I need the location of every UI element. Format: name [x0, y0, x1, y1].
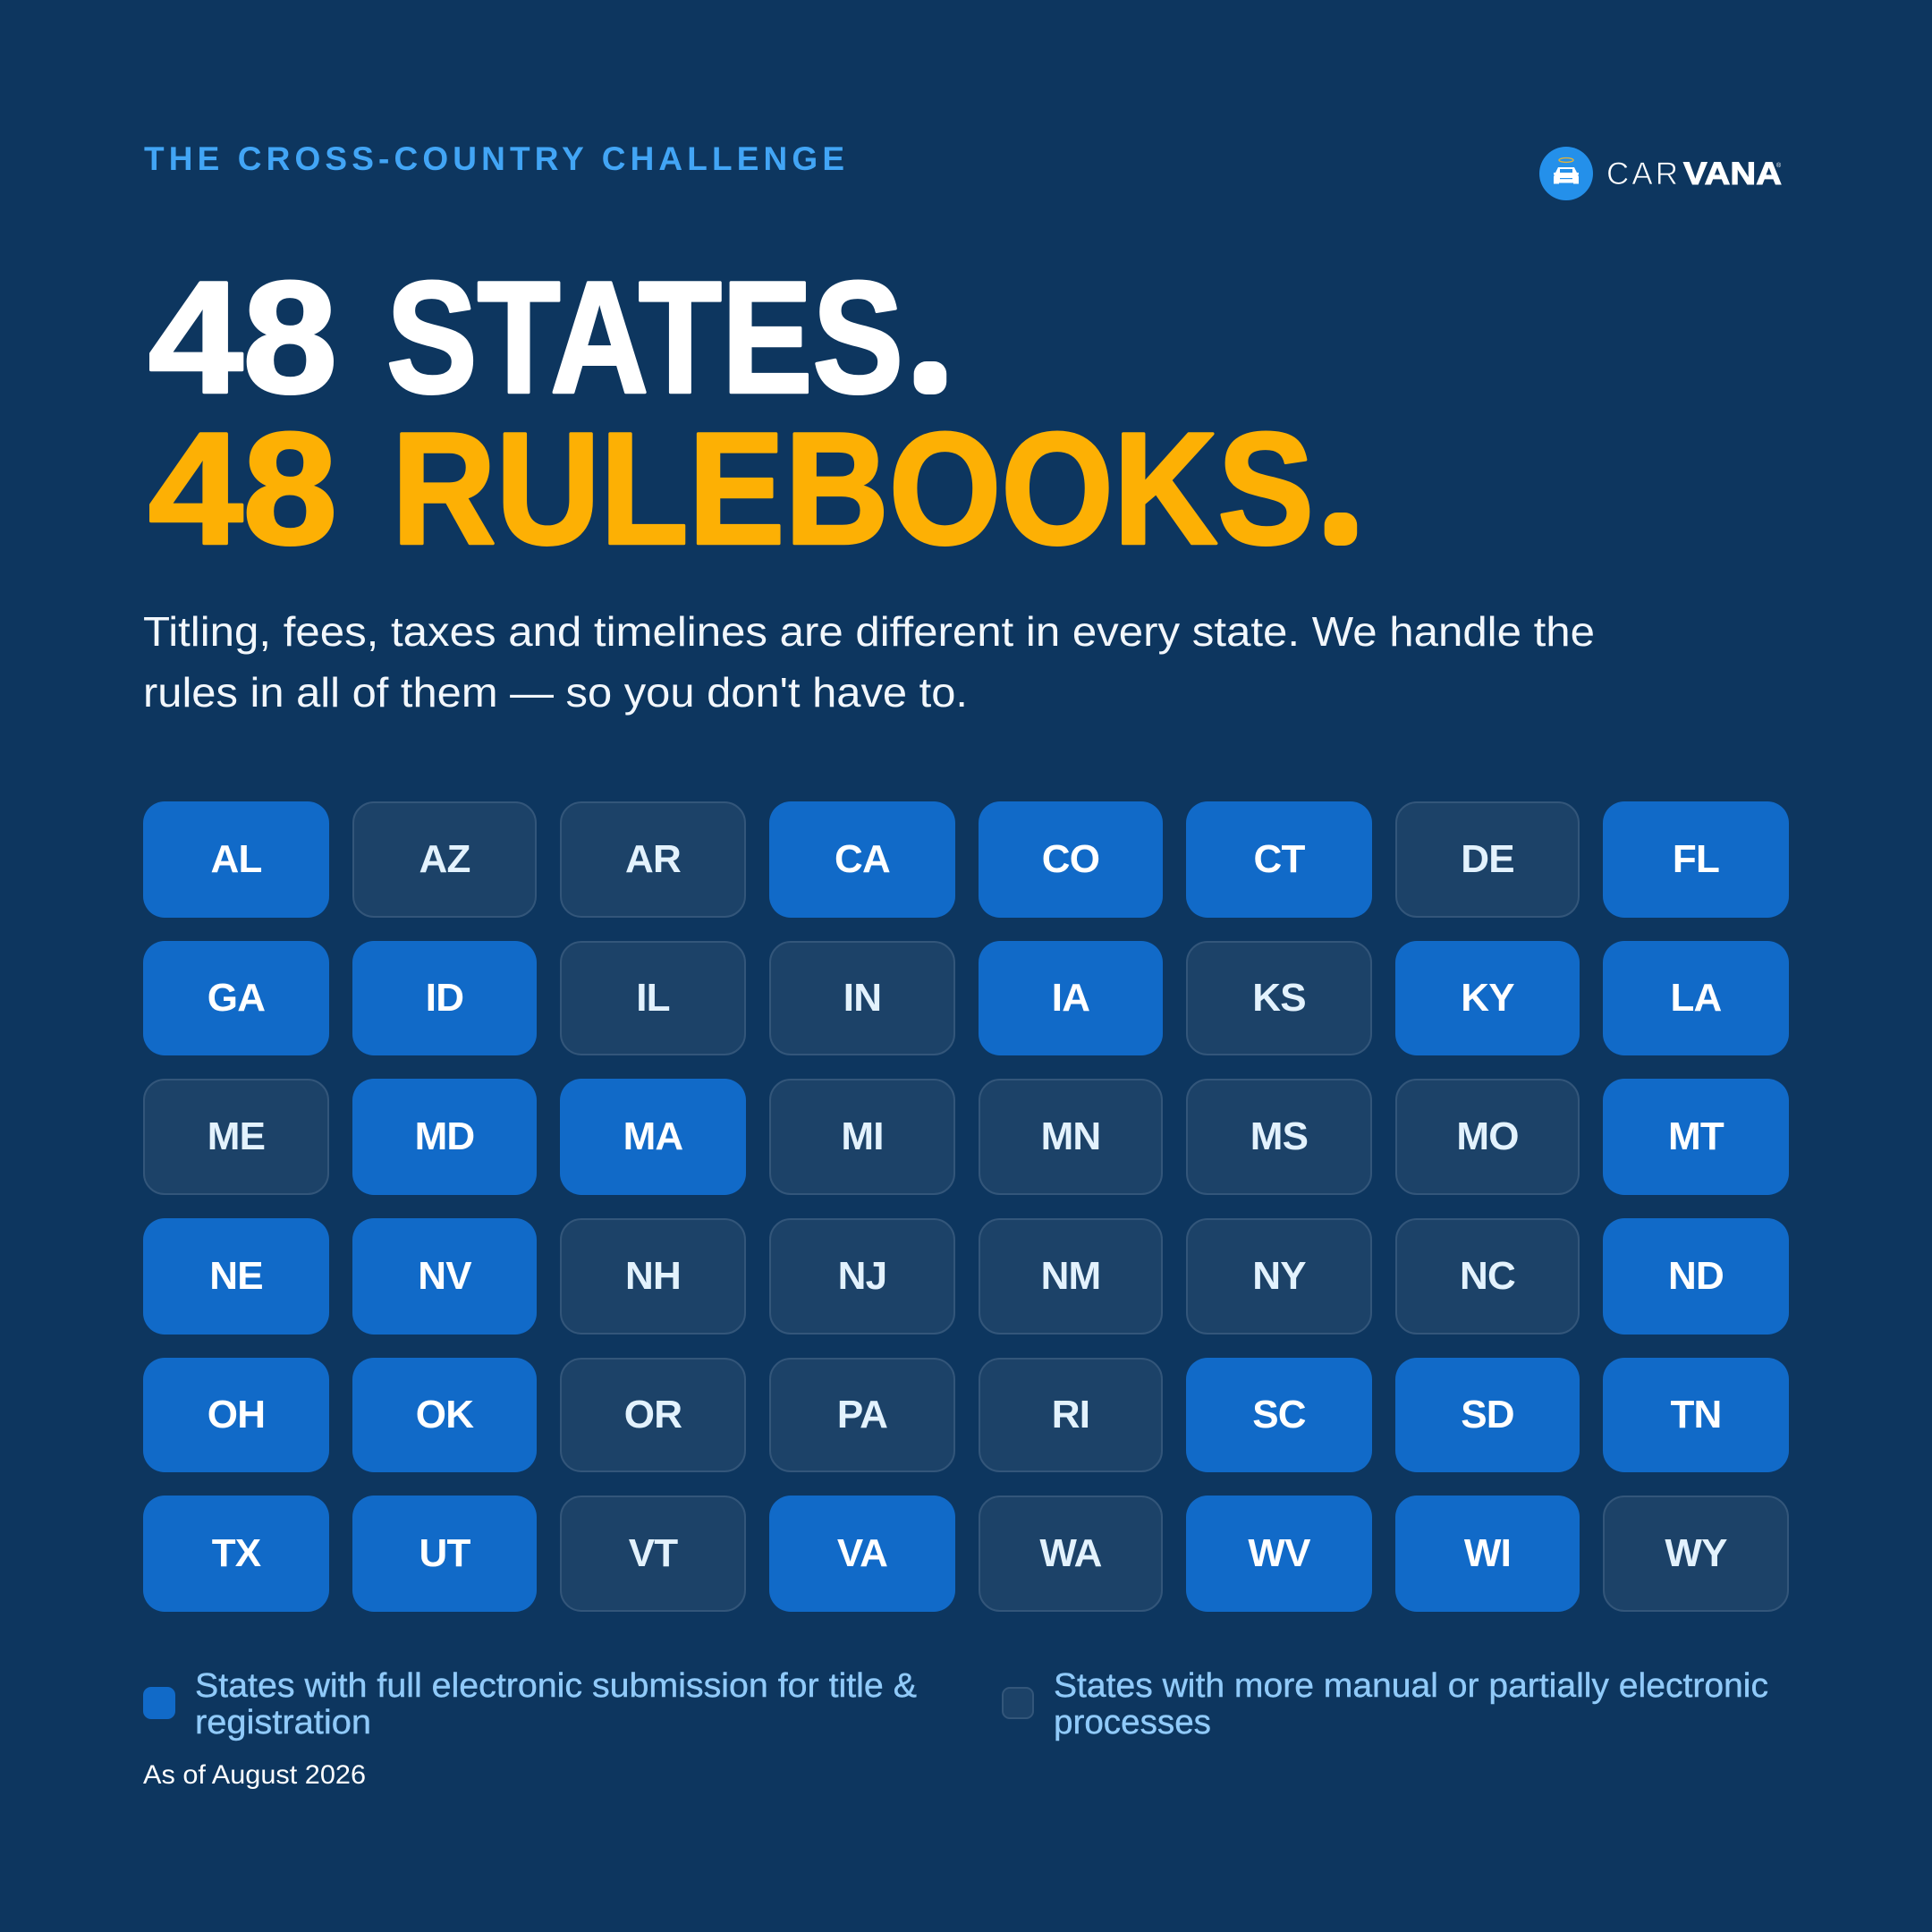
tile: KS: [1186, 941, 1372, 1055]
tile: IL: [560, 941, 746, 1055]
title line 2: RULEBOOKS: [392, 399, 1314, 578]
title line 1: [148, 249, 937, 426]
tile: SC: SC: [1252, 1393, 1306, 1436]
tile: MD: [352, 1079, 537, 1195]
tile: NC: NC: [1460, 1254, 1515, 1298]
legend: full electronic: registration: [195, 1704, 371, 1741]
icon: logo circle with car: [1539, 147, 1593, 200]
wordmark: VANA: [1683, 157, 1782, 191]
tile: AL: [143, 801, 329, 918]
wordmark: [1606, 157, 1782, 191]
tile: ID: ID: [426, 976, 463, 1020]
tile: CO: CO: [1042, 837, 1099, 881]
tile: MO: MO: [1456, 1114, 1519, 1158]
tile: FL: FL: [1673, 837, 1719, 881]
tile: OR: [560, 1358, 746, 1472]
legend: full electronic: [143, 1667, 917, 1741]
tile: CO: [979, 801, 1163, 918]
tile: ND: [1603, 1218, 1789, 1335]
tile: MT: [1603, 1079, 1789, 1195]
legend: manual or partial: States with more manual or partially electronic: [1054, 1667, 1768, 1705]
tile: CT: CT: [1253, 837, 1305, 881]
tile: NE: [143, 1218, 329, 1335]
eyebrow heading: THE CROSS-COUNTRY CHALLENGE: [144, 140, 844, 177]
tile: GA: GA: [208, 976, 265, 1020]
tile: MA: [560, 1079, 746, 1195]
tile: PA: [769, 1358, 955, 1472]
tile: NY: [1186, 1218, 1372, 1335]
tile: GA: [143, 941, 329, 1055]
tile: VA: [769, 1496, 955, 1612]
subtitle text: [143, 608, 1595, 716]
tile: WV: WV: [1248, 1531, 1310, 1575]
tile: WY: WY: [1665, 1531, 1727, 1575]
tile: NM: NM: [1041, 1254, 1100, 1298]
tile: SC: [1186, 1358, 1372, 1472]
tile: NV: [352, 1218, 537, 1335]
tile: FL: [1603, 801, 1789, 918]
tile: NE: NE: [209, 1254, 263, 1298]
date note: As of August 2026: [143, 1760, 366, 1790]
tile: VA: VA: [837, 1531, 887, 1575]
subtitle text: Titling, fees, taxes and timelines are different in every state. We handle the: [143, 608, 1595, 655]
legend: full electronic: States with full electronic submission for title &: [195, 1667, 917, 1705]
tile: MO: [1395, 1079, 1580, 1195]
tile: AL: AL: [210, 837, 262, 881]
tile: IA: [979, 941, 1163, 1055]
tile: NJ: [769, 1218, 955, 1335]
tile: LA: LA: [1670, 976, 1722, 1020]
tile: NH: [560, 1218, 746, 1335]
tile: WY: [1603, 1496, 1789, 1612]
tile: MI: MI: [841, 1114, 884, 1158]
tile: IN: IN: [843, 976, 881, 1020]
tile: CA: [769, 801, 955, 918]
tile: MI: [769, 1079, 955, 1195]
title line 1: .: [923, 334, 937, 394]
tile: OH: OH: [208, 1393, 265, 1436]
title line 1: 48: [148, 249, 337, 426]
tile: AZ: [352, 801, 537, 918]
tile: NH: NH: [625, 1254, 681, 1298]
tile: MN: MN: [1041, 1114, 1100, 1158]
tile: WI: [1395, 1496, 1580, 1612]
tile: KY: KY: [1461, 976, 1514, 1020]
tile: AR: [560, 801, 746, 918]
tile: NC: [1395, 1218, 1580, 1335]
state tile grid: [143, 801, 1789, 1612]
tile: MS: MS: [1250, 1114, 1308, 1158]
tile: KY: [1395, 941, 1580, 1055]
title line 2: 48: [148, 399, 337, 578]
tile: NJ: NJ: [838, 1254, 886, 1298]
tile: UT: UT: [419, 1531, 470, 1575]
tile: RI: [979, 1358, 1163, 1472]
tile: SD: SD: [1461, 1393, 1514, 1436]
tile: NM: [979, 1218, 1163, 1335]
tile: IA: IA: [1052, 976, 1089, 1020]
tile: CT: [1186, 801, 1372, 918]
tile: AR: AR: [625, 837, 681, 881]
title line 1: STATES: [386, 249, 903, 426]
tile: MT: MT: [1668, 1114, 1724, 1158]
tile: OK: [352, 1358, 537, 1472]
tile: RI: RI: [1052, 1393, 1089, 1436]
tile: VT: VT: [629, 1531, 677, 1575]
tile: NV: NV: [418, 1254, 471, 1298]
tile: WV: [1186, 1496, 1372, 1612]
tile: MS: [1186, 1079, 1372, 1195]
tile: VT: [560, 1496, 746, 1612]
tile: WA: [979, 1496, 1163, 1612]
tile: AZ: AZ: [419, 837, 470, 881]
wordmark: CAR: [1606, 157, 1678, 191]
tile: ME: ME: [208, 1114, 265, 1158]
logo: Carvana: [1539, 147, 1782, 200]
tile: IL: IL: [636, 976, 670, 1020]
tile: MN: [979, 1079, 1163, 1195]
tile: WI: WI: [1464, 1531, 1511, 1575]
tile: TX: TX: [212, 1531, 260, 1575]
tile: ID: [352, 941, 537, 1055]
tile: UT: [352, 1496, 537, 1612]
tile: TX: [143, 1496, 329, 1612]
tile: ND: ND: [1668, 1254, 1724, 1298]
tile: MA: MA: [623, 1114, 682, 1158]
tile: DE: [1395, 801, 1580, 918]
title line 2: .: [1334, 485, 1348, 545]
tile: CA: CA: [835, 837, 890, 881]
tile: OR: OR: [624, 1393, 682, 1436]
tile: NY: NY: [1252, 1254, 1306, 1298]
tile: SD: [1395, 1358, 1580, 1472]
tile: WA: WA: [1039, 1531, 1102, 1575]
tile: OH: [143, 1358, 329, 1472]
tile: LA: [1603, 941, 1789, 1055]
tile: OK: OK: [416, 1393, 473, 1436]
tile: DE: DE: [1461, 837, 1514, 881]
legend: manual or partial: processes: [1054, 1704, 1211, 1741]
tile: TN: TN: [1670, 1393, 1722, 1436]
wordmark: ®: [1776, 162, 1782, 169]
tile: IN: [769, 941, 955, 1055]
legend: manual or partial: [1003, 1667, 1768, 1741]
subtitle text: rules in all of them — so you don't have to.: [143, 669, 968, 716]
tile: PA: PA: [837, 1393, 887, 1436]
tile: TN: [1603, 1358, 1789, 1472]
tile: ME: [143, 1079, 329, 1195]
tile: KS: KS: [1252, 976, 1306, 1020]
tile: MD: MD: [415, 1114, 474, 1158]
